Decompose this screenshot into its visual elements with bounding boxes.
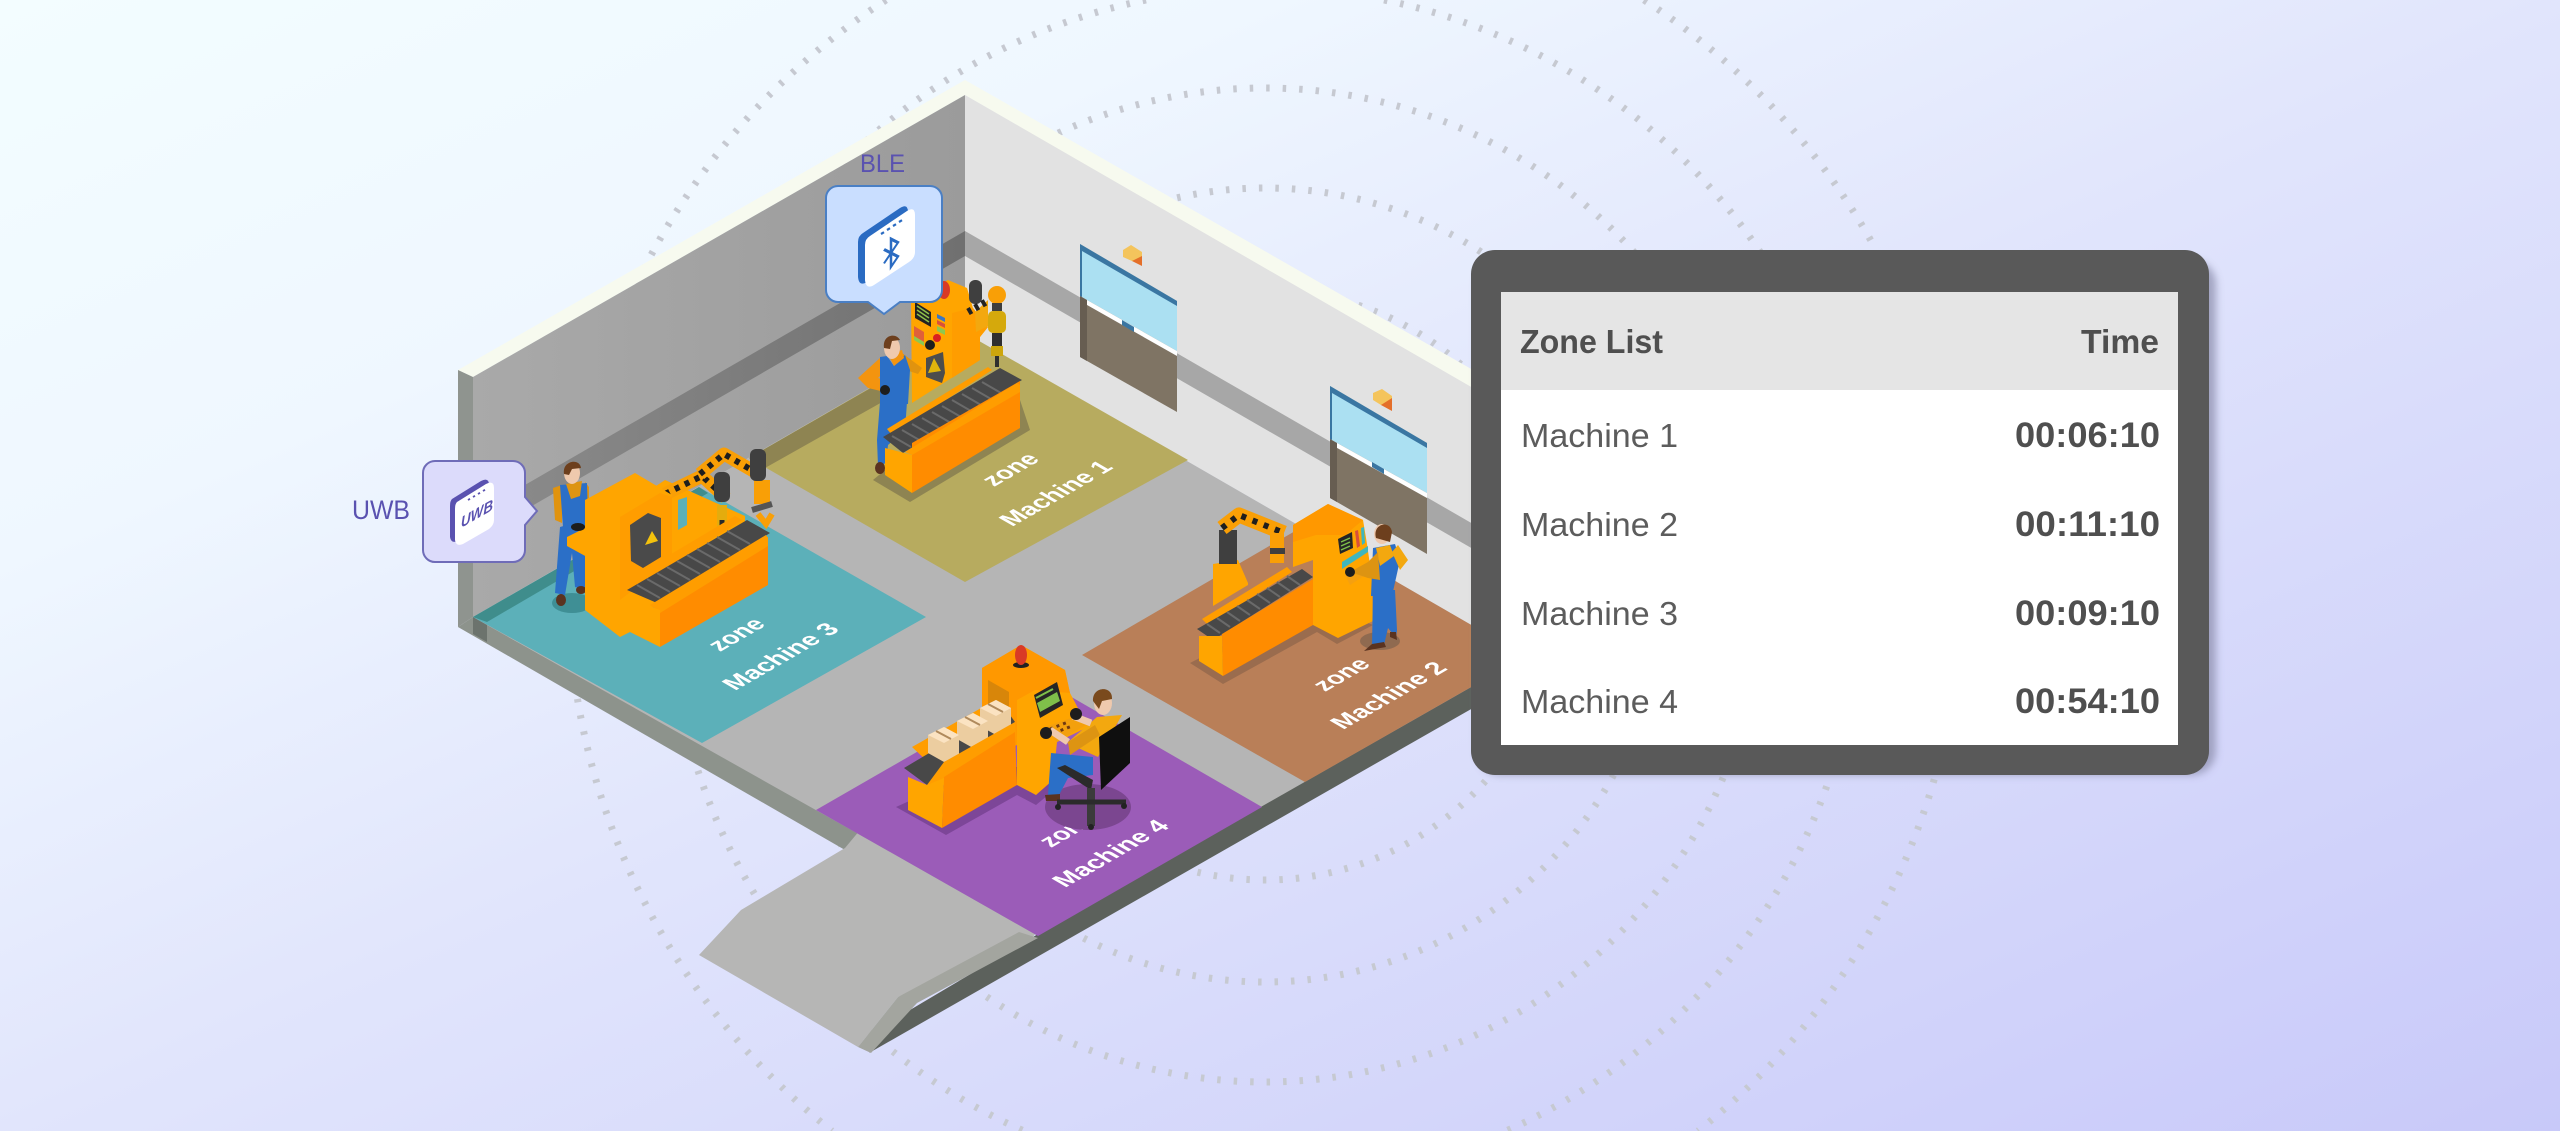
row: Machine 1 <box>1521 416 2160 455</box>
row: Machine 3 <box>1521 594 2160 633</box>
machine 1 <box>858 280 1030 502</box>
tower <box>911 280 988 403</box>
window 1 <box>1080 244 1177 412</box>
machine shadow <box>896 760 1060 835</box>
row: Machine 4 <box>1521 682 2160 721</box>
icon: bluetooth tile <box>858 206 915 287</box>
table header: Time <box>2081 323 2159 360</box>
dark cylinder <box>968 280 988 332</box>
row: Machine 4: 00:54:10 <box>2015 682 2160 721</box>
back rail <box>1202 567 1292 625</box>
box row <box>928 700 1011 762</box>
UWB callout <box>423 461 537 562</box>
row: Machine 2: Machine 2 <box>1521 506 1678 543</box>
zone: Machine 3 <box>473 487 926 743</box>
window 2 lamp <box>1373 389 1392 411</box>
conveyor front rail <box>927 722 1017 785</box>
zone: Machine 2: zone <box>1306 654 1377 695</box>
robot column <box>1219 530 1237 564</box>
row: Machine 1: Machine 1 <box>1521 417 1678 454</box>
worker 2 <box>1345 524 1408 651</box>
row: Machine 1: 00:06:10 <box>2015 416 2160 455</box>
control box <box>630 513 661 568</box>
panel shadow <box>1477 260 2216 775</box>
panel frame <box>1471 250 2209 775</box>
floor corner shade <box>473 617 487 642</box>
right wall <box>965 95 1480 630</box>
console <box>1042 717 1086 742</box>
screen <box>915 302 931 327</box>
conveyor front rail <box>650 535 768 613</box>
BLE label: BLE <box>860 150 905 178</box>
zone: Machine 1: Machine 1 <box>993 457 1119 530</box>
robot arm <box>1222 515 1285 563</box>
zone: Machine 4: zone <box>1032 810 1103 851</box>
window 2 <box>1330 386 1427 554</box>
teal gap <box>678 497 687 530</box>
left wall end <box>458 370 473 627</box>
ramp <box>699 830 1038 1047</box>
table body <box>1501 292 2178 745</box>
robot arms <box>665 454 772 529</box>
table header: Zone List <box>1520 323 1663 360</box>
ramp side <box>858 932 1038 1053</box>
robot base <box>1213 560 1248 606</box>
worker 4 <box>1040 689 1122 801</box>
zone: Machine 3: Machine 3 <box>716 619 846 694</box>
beacon <box>938 281 950 299</box>
dotted signal rings <box>568 0 1962 1131</box>
row: Machine 3: Machine 3 <box>1521 595 1678 632</box>
zone: Machine 3: zone <box>701 614 772 655</box>
table header <box>1501 292 2178 390</box>
conveyor end <box>630 600 660 647</box>
row: Machine 4: Machine 4 <box>1521 683 1678 720</box>
beacon <box>1013 645 1029 668</box>
conveyor belt <box>883 368 1022 453</box>
conveyor body <box>912 381 1020 493</box>
screen <box>1034 682 1063 718</box>
back rail <box>636 516 742 582</box>
left wall band <box>473 231 965 540</box>
zone: Machine 4 <box>816 680 1262 936</box>
machine 3 <box>552 449 772 647</box>
opening <box>988 680 1009 716</box>
zone: Machine 4: Machine 4 <box>1046 816 1176 891</box>
conveyor end <box>908 777 944 828</box>
tall block <box>585 473 672 637</box>
row: Machine 3: 00:09:10 <box>2015 594 2160 633</box>
control box <box>926 352 945 383</box>
robot arm <box>988 286 1006 367</box>
machine 2 <box>1190 504 1408 684</box>
conveyor body <box>1222 579 1313 676</box>
zone: Machine 1: zone <box>975 449 1046 490</box>
wall top cap <box>458 80 1480 395</box>
row: Machine 2 <box>1521 505 2160 544</box>
screen <box>1338 532 1353 554</box>
worker 3 <box>552 462 592 613</box>
button panel <box>914 314 945 346</box>
office chair <box>1055 717 1130 830</box>
conveyor belt <box>904 708 1015 785</box>
conveyor front rail <box>905 383 1020 455</box>
tower <box>982 645 1088 795</box>
right wall band <box>965 231 1480 553</box>
icon: UWB tile: UWB <box>461 497 493 532</box>
back body <box>620 480 745 600</box>
floor front right edge <box>869 682 1480 1053</box>
back rail <box>912 690 1015 777</box>
dark cylinders <box>662 449 766 519</box>
window 1 lamp <box>1123 245 1142 266</box>
isometric factory room <box>458 80 1480 1053</box>
worker 1 <box>858 336 935 474</box>
back rail <box>887 367 992 435</box>
control panel <box>1342 527 1373 585</box>
left wall <box>473 95 965 617</box>
worker console <box>567 523 587 557</box>
machine 4 <box>896 645 1131 835</box>
conveyor body <box>942 732 1017 828</box>
conveyor belt <box>1197 569 1313 640</box>
floor <box>473 333 1480 936</box>
UWB label: UWB <box>352 495 410 525</box>
zone: Machine 2 <box>1082 527 1480 782</box>
zone: Machine 2: Machine 2 <box>1324 658 1454 733</box>
conveyor belt <box>627 520 770 603</box>
conveyor end <box>885 448 912 493</box>
row: Machine 2: 00:11:10 <box>2015 505 2160 544</box>
zone list panel <box>1471 250 2216 775</box>
chair shadow <box>1045 784 1131 830</box>
machine shadow <box>1190 600 1373 684</box>
machine shadow <box>873 400 1030 502</box>
conveyor body <box>658 537 768 647</box>
BLE callout <box>826 186 942 314</box>
zone: Machine 1 <box>749 333 1188 582</box>
tower <box>1293 504 1373 638</box>
floor front left edge <box>458 617 862 850</box>
conveyor end <box>1199 636 1223 676</box>
